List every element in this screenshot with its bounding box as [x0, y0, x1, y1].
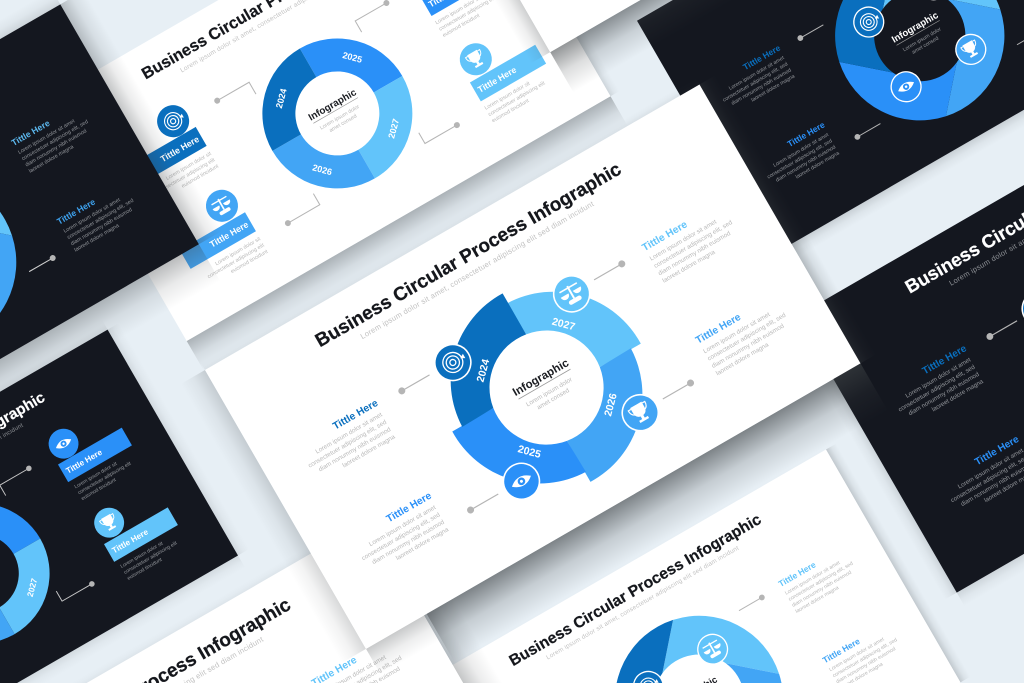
text block: right 2: consectetuer adipiscing elit, sed	[706, 312, 788, 363]
text block: right 1: consectetuer adipiscing elit, sed	[653, 219, 734, 270]
panel: top right dark card: laoreet dolore magna	[795, 150, 841, 180]
text block: right 2: Lorem ipsum dolor sit amet	[702, 311, 772, 355]
panel: top left dark card: Lorem ipsum dolor sit amet	[17, 118, 77, 156]
text block: right 1	[641, 199, 743, 285]
tag: left 2: euismod tincidunt	[230, 249, 270, 275]
panel: top right dark card	[637, 0, 1024, 255]
tag: right 1	[404, 0, 510, 39]
panel: right dark card	[797, 36, 1024, 593]
tag: right 2	[453, 16, 559, 124]
panel: right dark card: consectetuer adipiscing elit, sed	[897, 363, 977, 413]
text block: right 1: Lorem ipsum dolor sit amet	[649, 218, 718, 263]
tag: left 1: Tittle Here	[159, 134, 201, 164]
panel: top left dark card: consectetuer adipiscing elit, sed	[21, 119, 89, 162]
tag: eye: Lorem ipsum dolor sit	[74, 461, 119, 490]
donut chart: amet consed	[328, 113, 358, 134]
panel: top right dark card: laoreet dolore magna	[750, 74, 796, 103]
panel: top left dark card: Tittle Here	[10, 118, 52, 148]
tag: trophy: consectetuer adipiscing elit	[123, 540, 179, 576]
panel: top right dark card: Lorem ipsum dolor sit amet	[772, 132, 830, 169]
panel: top right dark card: diam nonummy nibh euismod	[775, 144, 837, 184]
panel: top left dark card: laoreet dolore magna	[28, 144, 75, 175]
pinwheel donut	[0, 133, 70, 403]
text block: left 1: diam nonummy nibh euismod	[317, 426, 393, 473]
text block: left 1: Lorem ipsum dolor sit amet	[314, 411, 384, 455]
text block: left 2	[349, 490, 452, 577]
donut chart: 2027	[25, 577, 39, 598]
panel: right dark card: Tittle Here	[973, 434, 1021, 468]
tag: right 2: Tittle Here	[476, 65, 518, 95]
text block: right 1: Tittle Here	[641, 219, 690, 254]
tag: right 2: consectetuer adipiscing elit	[487, 80, 547, 118]
title: Business Circular Process Infographic	[312, 159, 625, 352]
panel: bottom white card: consectetuer adipiscing elit, sed	[788, 561, 854, 603]
text block: left 1: consectetuer adipiscing elit, sed	[307, 419, 388, 470]
panel: bottom white card: Business Circular Process Infographic	[506, 511, 765, 670]
text block: left 2: Tittle Here	[385, 490, 434, 525]
tag: eye: consectetuer adipiscing elit	[77, 460, 133, 496]
donut chart	[235, 11, 440, 216]
panel: bottom left white card	[0, 520, 532, 683]
text block: right 2	[694, 292, 796, 378]
panel: bottom white card: consectetuer adipiscing elit, sed	[832, 637, 899, 679]
circular process chart: 2025	[516, 443, 542, 461]
text block: right 2: laoreet dolore magna	[715, 341, 770, 377]
tag: trophy	[89, 481, 190, 583]
elbow connectors	[0, 465, 98, 604]
tag: left 1	[114, 99, 220, 206]
tag: trophy: Lorem ipsum dolor sit	[120, 540, 165, 570]
tag: left 2: Tittle Here	[208, 219, 250, 249]
donut chart: 2026	[311, 162, 333, 177]
panel: top right dark card: Tittle Here	[786, 119, 827, 149]
panel: top right dark card: consectetuer adipiscing elit, sed	[722, 61, 789, 104]
panel: top center white card	[404, 0, 995, 52]
panel: right dark card: diam nonummy nibh euismod	[907, 371, 981, 417]
donut chart: Infographic	[307, 87, 359, 123]
tag: left 2: consectetuer adipiscing elit	[207, 242, 266, 280]
pinwheel donut: Lorem ipsum dolor	[902, 26, 943, 53]
circular process chart: Infographic	[511, 357, 572, 399]
tag: left 2	[163, 183, 270, 292]
text block: right 1: diam nonummy nibh euismod	[657, 230, 732, 277]
panel: bottom white card: Tittle Here	[777, 559, 818, 589]
tag: trophy: Tittle Here	[111, 527, 150, 555]
text block: left 2: laoreet dolore magna	[395, 526, 450, 562]
circular process chart: 2024	[475, 358, 492, 384]
tag: eye	[43, 402, 144, 504]
pinwheel donut	[563, 564, 835, 683]
tag: trophy: euismod tincidunt	[126, 557, 164, 582]
circular process chart	[394, 235, 699, 540]
pinwheel donut: amet consed	[911, 36, 940, 56]
text block: left 1	[296, 398, 398, 484]
pinwheel donut: Infographic	[890, 10, 941, 46]
tag: left 2: Lorem ipsum dolor sit	[214, 236, 262, 267]
panel: top left dark card: consectetuer adipiscing elit, sed	[66, 198, 135, 241]
panel: top right dark card: Lorem ipsum dolor sit amet	[728, 55, 786, 92]
panel: left dark card	[0, 330, 238, 683]
text block: left 2: diam nonummy nibh euismod	[371, 519, 446, 566]
panel: right dark card: Tittle Here	[921, 343, 969, 377]
panel: main white card	[205, 84, 861, 649]
tag: eye: Tittle Here	[65, 448, 104, 476]
panel: bottom white card: Tittle Here	[821, 636, 862, 665]
donut chart	[0, 478, 75, 669]
text block: left 1: Tittle Here	[331, 398, 380, 433]
panel: top left dark card: laoreet dolore magna	[74, 223, 120, 253]
circular process chart: Lorem ipsum dolor	[525, 376, 574, 408]
tag: eye: euismod tincidunt	[80, 477, 118, 502]
circular process chart: 2027	[551, 316, 576, 333]
text block: right 2: diam nonummy nibh euismod	[711, 322, 786, 370]
panel: top right dark card: consectetuer adipiscing elit, sed	[766, 138, 833, 180]
panel: right dark card: Lorem ipsum dolor sit amet	[957, 447, 1024, 491]
text block: left 2: Lorem ipsum dolor sit amet	[368, 504, 437, 548]
panel: top right dark card: Tittle Here	[741, 43, 782, 72]
tag: right 2: Lorem ipsum dolor sit	[484, 81, 532, 112]
tag: right 2: euismod tincidunt	[491, 98, 531, 124]
text block: left 2: consectetuer adipiscing elit, sed	[361, 511, 442, 562]
circular process chart: 2026	[602, 392, 620, 418]
donut chart: 2024	[274, 87, 289, 109]
tag: left 1: euismod tincidunt	[181, 163, 220, 190]
tag: left 1: consectetuer adipiscing elit	[157, 157, 217, 195]
elbow connectors	[213, 0, 461, 227]
donut chart: Lorem ipsum dolor	[319, 104, 361, 131]
panel: bottom white card: Lorem ipsum dolor sit amet	[828, 636, 886, 673]
text block: left 1: laoreet dolore magna	[341, 433, 397, 469]
panel: top left dark card: Lorem ipsum dolor sit amet	[63, 197, 122, 235]
panel: bottom white card: laoreet dolore magna	[795, 585, 840, 615]
tag: right 1: euismod tincidunt	[442, 13, 481, 39]
circular process chart: amet consed	[536, 387, 571, 411]
panel: top left dark card: Tittle Here	[55, 197, 97, 227]
panel: top left dark card: diam nonummy nibh euismod	[24, 128, 88, 168]
panel: bottom white card	[418, 449, 960, 683]
panel: bottom white card: diam nonummy nibh euismod	[791, 570, 853, 609]
donut chart: 2027	[386, 118, 401, 139]
donut chart: 2025	[341, 50, 363, 65]
tag: left 1: Lorem ipsum dolor sit	[165, 151, 213, 182]
connectors	[397, 259, 695, 515]
panel: right dark card: laoreet dolore magna	[931, 378, 985, 413]
panel: top right dark card: diam nonummy nibh euismod	[731, 67, 793, 107]
panel: bottom white card: Lorem ipsum dolor sit amet	[784, 560, 842, 597]
text block: right 2: Tittle Here	[694, 312, 743, 347]
panel: top white card	[47, 0, 610, 341]
panel: top left dark card: diam nonummy nibh euismod	[70, 207, 133, 247]
panel: top left dark card	[0, 4, 199, 487]
pinwheel donut	[783, 0, 1024, 173]
panel: bottom white card: Lorem ipsum dolor sit amet, consectetuer adipiscing elit sed diam incidunt	[545, 545, 740, 661]
subtitle: Lorem ipsum dolor sit amet, consectetuer adipiscing elit sed diam incidunt	[359, 199, 596, 341]
text block: right 1: laoreet dolore magna	[661, 249, 717, 285]
panel: right dark card: Lorem ipsum dolor sit amet	[904, 356, 972, 400]
